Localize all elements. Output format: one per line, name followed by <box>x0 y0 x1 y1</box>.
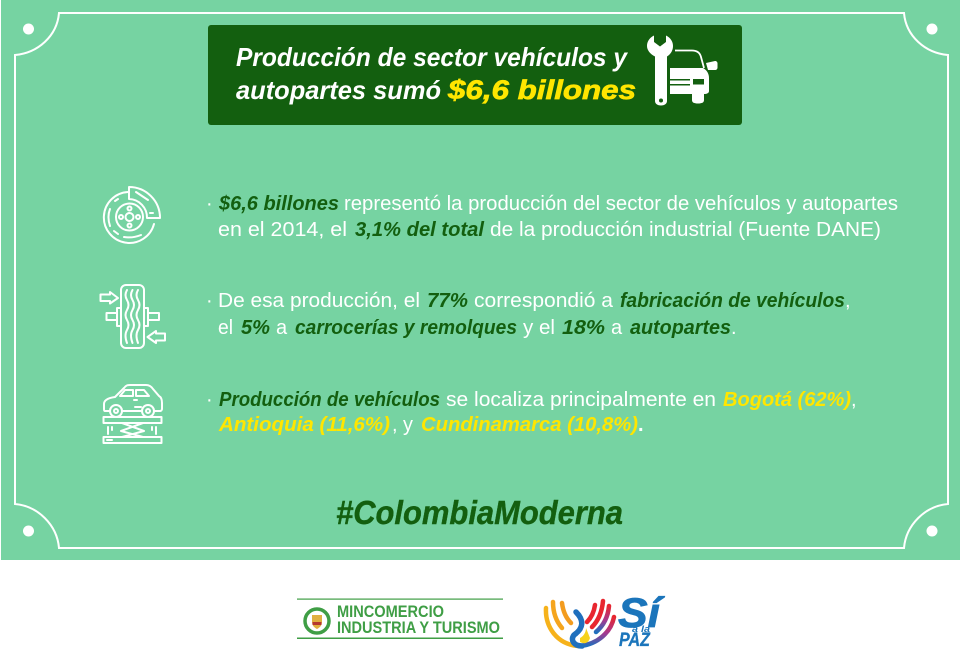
icon: hands and dove <box>546 601 614 646</box>
text: paragraph 3: Producción de vehículos <box>219 389 440 411</box>
icon: national seal <box>305 609 329 633</box>
text: Sí a la Paz: PAZ <box>619 630 651 651</box>
text: paragraph 2: , <box>845 290 851 312</box>
title banner <box>208 25 742 125</box>
text: paragraph 3: . <box>638 414 644 436</box>
text: paragraph 2: correspondió a <box>474 290 614 312</box>
text: Sí a la Paz <box>618 589 666 651</box>
text: paragraph 2: · <box>206 290 213 312</box>
text: paragraph 2: y el <box>523 317 555 339</box>
title text <box>236 42 636 105</box>
logo: Mincomercio: INDUSTRIA Y TURISMO <box>337 619 500 637</box>
text: paragraph 1: · <box>206 193 213 215</box>
text: paragraph 3: , y <box>392 414 413 436</box>
text: paragraph 3: , <box>851 389 857 411</box>
title text: $6,6 billones <box>447 75 636 105</box>
text: paragraph 3: Bogotá (62%) <box>723 389 851 411</box>
text: Sí a la Paz: Sí <box>618 589 666 636</box>
text: paragraph 2: carrocerías y remolques <box>295 317 517 339</box>
text: paragraph 3: · <box>206 389 213 411</box>
logo: Mincomercio <box>297 598 503 639</box>
text: paragraph 1: 3,1% del total <box>355 219 484 241</box>
text: paragraph 2: el <box>218 317 233 339</box>
icon: brake disc <box>104 187 160 243</box>
text: paragraph 1 <box>206 193 898 241</box>
text: paragraph 3: Cundinamarca (10,8%) <box>421 414 638 436</box>
decorative frame <box>15 13 948 548</box>
text: paragraph 2: fabricación de vehículos <box>620 290 845 312</box>
text: paragraph 2: De esa producción, el <box>218 290 420 312</box>
title text: Producción de sector vehículos y <box>236 42 628 72</box>
text: paragraph 3: Antioquia (11,6%) <box>218 414 390 436</box>
text: paragraph 2: autopartes <box>630 317 731 339</box>
text: paragraph 1: representó la producción del sector de vehículos y autopartes <box>344 193 898 215</box>
text: paragraph 2: 5% <box>241 317 270 339</box>
text: paragraph 3 <box>206 389 857 436</box>
icon: car on lift <box>104 385 162 443</box>
hashtag: #ColombiaModerna <box>336 494 623 531</box>
title text: autopartes sumó <box>236 75 441 105</box>
text: paragraph 2: 77% <box>427 290 468 312</box>
text: paragraph 3: se localiza principalmente en <box>446 389 716 411</box>
text: paragraph 1: $6,6 billones <box>218 193 339 215</box>
icon: tire with arrows <box>100 285 165 348</box>
logo: Sí a la Paz <box>546 589 666 651</box>
text: paragraph 1: de la producción industrial (Fuente DANE) <box>490 219 881 241</box>
icon: wrench and car <box>647 36 718 106</box>
text: paragraph 2: 18% <box>562 317 605 339</box>
text: paragraph 2: a <box>611 317 623 339</box>
text: paragraph 2 <box>206 290 851 339</box>
logo: Mincomercio: MINCOMERCIO <box>337 603 444 621</box>
text: paragraph 1: en el 2014, el <box>218 219 347 241</box>
text: paragraph 2: . <box>731 317 737 339</box>
text: paragraph 2: a <box>276 317 288 339</box>
text: Sí a la Paz: a la <box>632 624 650 634</box>
